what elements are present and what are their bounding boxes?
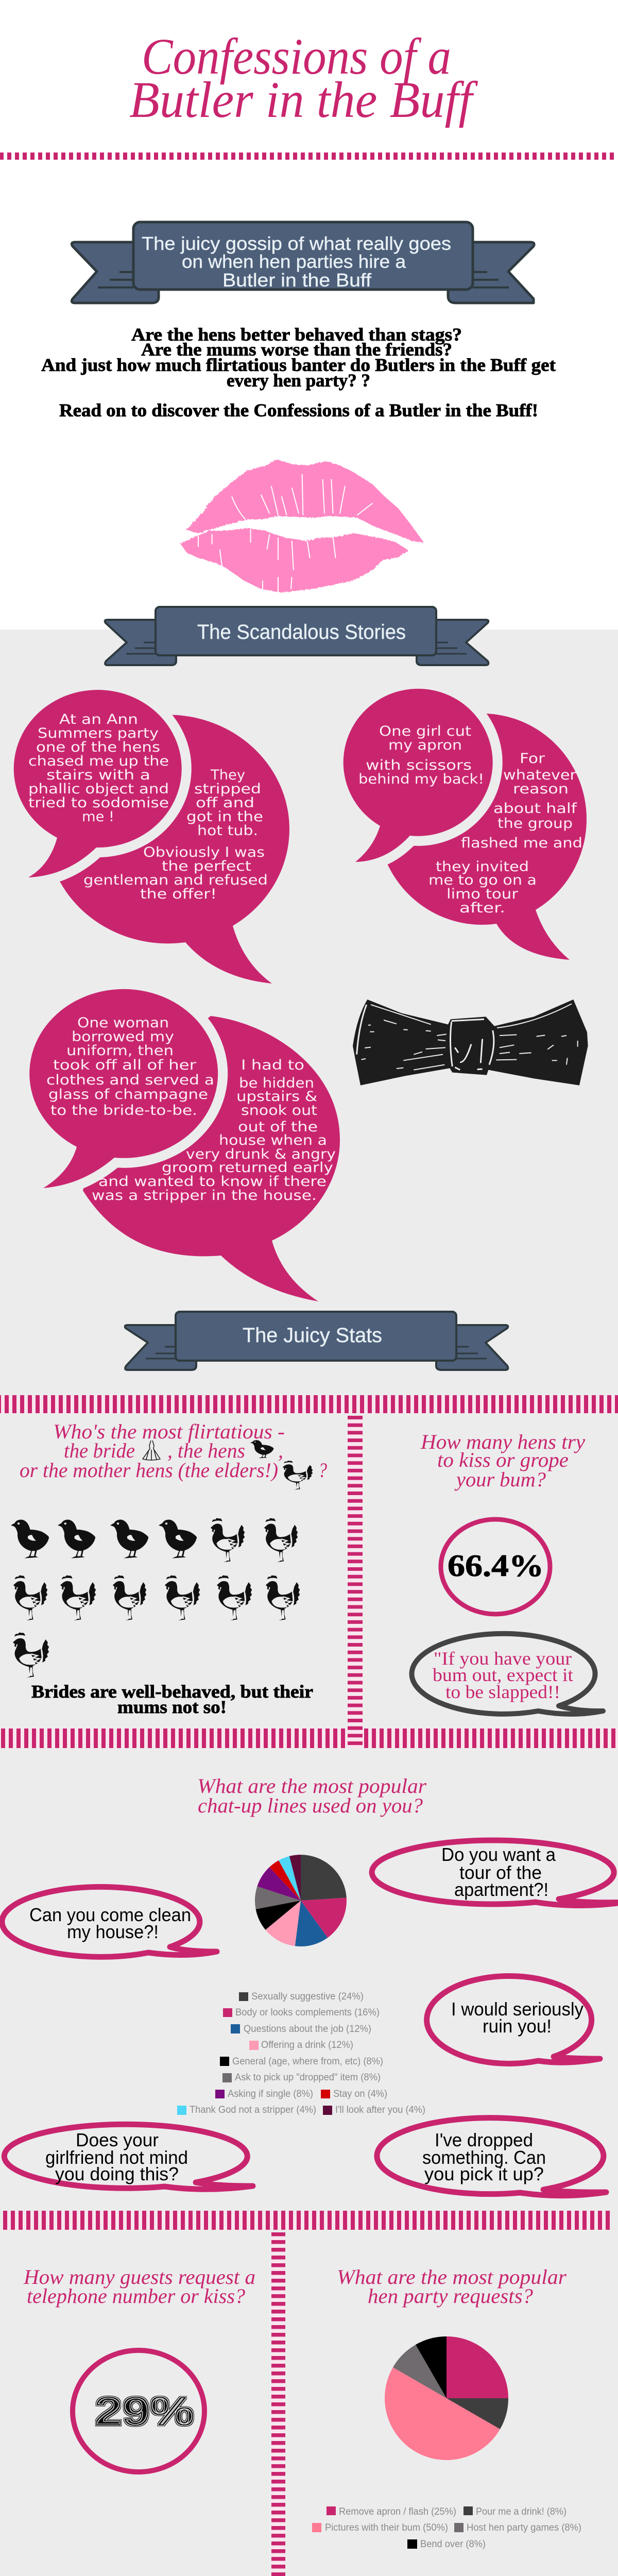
speech bubbles: uniform and angry groom story: took off all of her bbox=[53, 1057, 197, 1073]
legend: chat-up lines: Asking if single (8%) bbox=[228, 2089, 313, 2099]
caption: brides well-behaved: Brides are well-behaved, but their bbox=[31, 1682, 313, 1702]
speech bubbles: hot tub story: got in the bbox=[186, 809, 263, 825]
heading: most flirtatious bbox=[20, 1420, 327, 1482]
heading: most flirtatious: ? bbox=[318, 1459, 327, 1482]
speech bubbles: hot tub story: chased me up the bbox=[28, 753, 169, 769]
legend: chat-up lines: Sexually suggestive (24%) bbox=[251, 1991, 364, 2002]
quote bubble: expect it to be slapped bbox=[412, 1634, 603, 1714]
stat circle: 29% bbox=[73, 2350, 204, 2472]
speech bubbles: uniform and angry groom story: borrowed my bbox=[72, 1029, 174, 1045]
speech bubbles: hot tub story bbox=[14, 690, 289, 984]
heading: telephone number or kiss: How many guests request a bbox=[23, 2265, 255, 2289]
speech bubbles: uniform and angry groom story: house when a bbox=[219, 1132, 327, 1148]
speech bubbles: hot tub story: tried to sodomise bbox=[28, 795, 169, 811]
speech bubbles: hot tub story: Obviously I was bbox=[143, 844, 265, 860]
caption: brides well-behaved bbox=[31, 1682, 313, 1717]
quote bubble: dropped something: something. Can bbox=[422, 2147, 546, 2168]
panel: telephone number or kiss stat bbox=[23, 2265, 255, 2472]
legend: hen party requests bbox=[312, 2506, 581, 2550]
heading: most flirtatious: or the mother hens (the elders!) bbox=[20, 1459, 278, 1482]
speech bubbles: hot tub story: hot tub. bbox=[197, 823, 258, 839]
speech bubbles: hot tub story: phallic object and bbox=[28, 781, 169, 797]
page background: grey lower section bbox=[0, 630, 618, 2576]
speech bubbles: apron and limo story: about half bbox=[493, 801, 578, 817]
heading: chat-up lines: What are the most popular bbox=[197, 1774, 426, 1798]
speech bubbles: apron and limo story: they invited bbox=[436, 859, 529, 875]
speech bubbles: uniform and angry groom story: One woman bbox=[77, 1015, 169, 1031]
speech bubbles: hot tub story: stairs with a bbox=[46, 767, 150, 783]
speech bubbles: hot tub story: me ! bbox=[82, 809, 114, 825]
speech bubbles: hot tub story: gentleman and refused bbox=[83, 872, 268, 888]
heading: hen party requests: What are the most popular bbox=[337, 2265, 566, 2289]
quote bubble: tour of the apartment: Do you want a bbox=[441, 1844, 556, 1865]
speech bubbles: uniform and angry groom story: to the bride-to-be. bbox=[50, 1103, 197, 1118]
ribbon: The Juicy Stats: The Juicy Stats bbox=[243, 1324, 382, 1347]
ribbon: The Juicy Stats bbox=[125, 1312, 508, 1370]
speech bubbles: hot tub story: Summers party bbox=[38, 725, 159, 741]
speech bubbles: uniform and angry groom story: clothes and served a bbox=[46, 1072, 214, 1088]
icon: hen chick bbox=[250, 1440, 274, 1458]
speech bubbles: uniform and angry groom story: uniform, then bbox=[66, 1043, 174, 1059]
speech bubbles: apron and limo story: behind my back! bbox=[358, 771, 484, 787]
quote bubble: dropped something: you pick it up? bbox=[424, 2163, 544, 2184]
title: Butler in the Buff bbox=[129, 71, 478, 128]
quote bubble: girlfriend not mind: girlfriend not mind bbox=[45, 2147, 188, 2168]
heading: telephone number or kiss: telephone number or kiss? bbox=[27, 2284, 245, 2308]
heading: telephone number or kiss bbox=[23, 2265, 255, 2308]
speech bubbles: hot tub story: At an Ann bbox=[59, 711, 138, 727]
quote bubble: girlfriend not mind: you doing this? bbox=[55, 2163, 179, 2184]
legend: chat-up lines: I'll look after you (4%) bbox=[335, 2105, 425, 2115]
icon: bow tie bbox=[353, 999, 588, 1086]
speech bubbles: apron and limo story: For bbox=[520, 751, 545, 767]
speech bubbles: apron and limo story bbox=[344, 689, 587, 960]
speech bubbles: hot tub story: one of the hens bbox=[36, 739, 160, 755]
caption: brides well-behaved: mums not so! bbox=[117, 1697, 227, 1717]
heading: most flirtatious: , the hens bbox=[167, 1439, 245, 1462]
pictogram: chicks and hens tally bbox=[11, 1518, 300, 1677]
heading: hen party requests: hen party requests? bbox=[368, 2284, 533, 2308]
panel: hen party requests bbox=[312, 2265, 581, 2550]
ribbon: The Scandalous Stories bbox=[105, 607, 488, 665]
speech bubbles: uniform and angry groom story: upstairs & bbox=[236, 1089, 317, 1105]
speech bubbles: uniform and angry groom story: be hidden bbox=[239, 1075, 314, 1091]
quote bubble: tour of the apartment: tour of the bbox=[459, 1862, 542, 1883]
speech bubbles: apron and limo story: reason bbox=[513, 781, 569, 797]
heading: hens kiss or grope: How many hens try bbox=[420, 1430, 585, 1453]
heading: most flirtatious: , bbox=[278, 1439, 283, 1462]
legend: chat-up lines: Questions about the job (12%) bbox=[244, 2024, 371, 2035]
speech bubbles: apron and limo story: flashed me and bbox=[461, 835, 582, 851]
intro text: And just how much flirtatious banter do Butlers in the Buff get bbox=[41, 355, 556, 375]
quote bubble: tour of the apartment bbox=[372, 1840, 618, 1905]
speech bubbles: hot tub story: stripped bbox=[194, 781, 261, 797]
panel: chat-up lines bbox=[2, 1774, 618, 2196]
speech bubbles: apron and limo story: One girl cut bbox=[379, 723, 471, 739]
intro text: Are the mums worse than the friends? bbox=[141, 340, 452, 360]
panel: who is most flirtatious bbox=[11, 1420, 327, 1717]
speech bubbles: apron and limo story: me to go on a bbox=[428, 872, 537, 888]
quote bubble: seriously ruin you: ruin you! bbox=[483, 2015, 552, 2037]
legend: chat-up lines: Thank God not a stripper (4%) bbox=[190, 2105, 316, 2115]
speech bubbles: hot tub story: off and bbox=[196, 795, 254, 811]
ribbon: intro banner: Butler in the Buff bbox=[222, 269, 372, 291]
legend: hen party requests: Bend over (8%) bbox=[420, 2539, 486, 2550]
speech bubbles: uniform and angry groom story: I had to bbox=[241, 1057, 304, 1073]
speech bubbles: apron and limo story: after. bbox=[459, 900, 505, 916]
icon: mother hen bbox=[283, 1461, 313, 1490]
title bbox=[129, 28, 478, 128]
legend: hen party requests: Pour me a drink! (8%) bbox=[476, 2506, 566, 2517]
title: Confessions of a bbox=[142, 28, 451, 85]
legend: chat-up lines: Body or looks complements (16%) bbox=[235, 2007, 380, 2018]
speech bubbles: apron and limo story: the group bbox=[497, 816, 573, 832]
quote bubble: clean my house: my house?! bbox=[67, 1921, 159, 1942]
quote bubble: dropped something: I've dropped bbox=[435, 2129, 533, 2150]
quote bubble: expect it to be slapped: bum out, expect it bbox=[433, 1665, 573, 1685]
icon: lipstick kiss bbox=[180, 460, 424, 592]
heading: hen party requests bbox=[337, 2265, 566, 2308]
speech bubbles: apron and limo story: limo tour bbox=[447, 886, 519, 902]
heading: chat-up lines: chat-up lines used on you? bbox=[198, 1794, 423, 1817]
stat circle: 29%: 29% bbox=[95, 2388, 194, 2434]
intro text: Read on to discover the Confessions of a Butler in the Buff! bbox=[59, 400, 538, 420]
quote bubble: clean my house bbox=[2, 1887, 217, 1957]
speech bubbles: uniform and angry groom story: out of the bbox=[238, 1119, 318, 1135]
stat circle: 66.4% bbox=[441, 1519, 550, 1614]
heading: hens kiss or grope: to kiss or grope bbox=[437, 1448, 569, 1471]
legend: hen party requests: Pictures with their bum (50%) bbox=[325, 2522, 448, 2533]
legend: chat-up lines: Offering a drink (12%) bbox=[261, 2040, 353, 2050]
quote bubble: seriously ruin you: I would seriously bbox=[451, 1998, 583, 2020]
speech bubbles: uniform and angry groom story bbox=[29, 989, 340, 1301]
ribbon: intro banner bbox=[72, 222, 534, 303]
heading: hens kiss or grope: your bum? bbox=[454, 1468, 546, 1491]
quote bubble: girlfriend not mind: Does your bbox=[76, 2129, 159, 2150]
speech bubbles: uniform and angry groom story: and wanted to know if there bbox=[98, 1174, 327, 1190]
pie chart: chat-up lines bbox=[255, 1855, 347, 1946]
speech bubbles: uniform and angry groom story: very drunk & angry bbox=[186, 1146, 336, 1162]
legend: hen party requests: Host hen party games (8%) bbox=[467, 2522, 581, 2533]
ribbon: The Scandalous Stories: The Scandalous Stories bbox=[197, 621, 406, 643]
intro text bbox=[41, 325, 556, 420]
quote bubble: expect it to be slapped: to be slapped!! bbox=[445, 1682, 560, 1702]
quote bubble: seriously ruin you bbox=[427, 1976, 600, 2063]
stat circle: 66.4%: 66.4% bbox=[448, 1549, 544, 1583]
quote bubble: tour of the apartment: apartment?! bbox=[454, 1879, 548, 1900]
speech bubbles: apron and limo story: whatever bbox=[503, 767, 577, 783]
speech bubbles: uniform and angry groom story: groom returned early bbox=[162, 1160, 333, 1176]
legend: chat-up lines: General (age, where from, etc) (8%) bbox=[232, 2056, 383, 2067]
heading: most flirtatious: the bride bbox=[64, 1439, 135, 1462]
speech bubbles: uniform and angry groom story: snook out bbox=[241, 1103, 317, 1118]
legend: hen party requests: Remove apron / flash (25%) bbox=[339, 2506, 456, 2517]
quote bubble: clean my house: Can you come clean bbox=[29, 1904, 191, 1925]
legend: chat-up lines: Stay on (4%) bbox=[333, 2089, 387, 2099]
quote bubble: dropped something bbox=[377, 2118, 606, 2196]
speech bubbles: apron and limo story: my apron bbox=[388, 737, 462, 753]
legend: chat-up lines: Ask to pick up "dropped" item (8%) bbox=[235, 2072, 381, 2083]
heading: chat-up lines bbox=[197, 1774, 426, 1817]
intro text: Are the hens better behaved than stags? bbox=[131, 325, 462, 345]
icon: bride dress bbox=[143, 1440, 160, 1460]
heading: most flirtatious: Who's the most flirtatious - bbox=[53, 1420, 285, 1443]
speech bubbles: hot tub story: They bbox=[210, 767, 245, 783]
speech bubbles: uniform and angry groom story: glass of champagne bbox=[48, 1087, 208, 1103]
heading: hens kiss or grope bbox=[420, 1430, 585, 1491]
legend: chat-up lines bbox=[177, 1991, 425, 2115]
speech bubbles: uniform and angry groom story: was a stripper in the house. bbox=[92, 1188, 317, 1204]
ribbon: intro banner: The juicy gossip of what really goes bbox=[142, 233, 451, 254]
panel: hens grope stat bbox=[412, 1430, 603, 1714]
speech bubbles: hot tub story: the perfect bbox=[162, 858, 251, 874]
intro text: every hen party? ? bbox=[227, 370, 370, 391]
pie chart: hen party requests bbox=[385, 2336, 508, 2460]
quote bubble: girlfriend not mind bbox=[4, 2124, 253, 2189]
speech bubbles: hot tub story: the offer! bbox=[140, 886, 217, 902]
speech bubbles: apron and limo story: with scissors bbox=[366, 757, 472, 773]
ribbon: intro banner: on when hen parties hire a bbox=[182, 251, 406, 272]
quote bubble: expect it to be slapped: "If you have your bbox=[434, 1648, 572, 1669]
